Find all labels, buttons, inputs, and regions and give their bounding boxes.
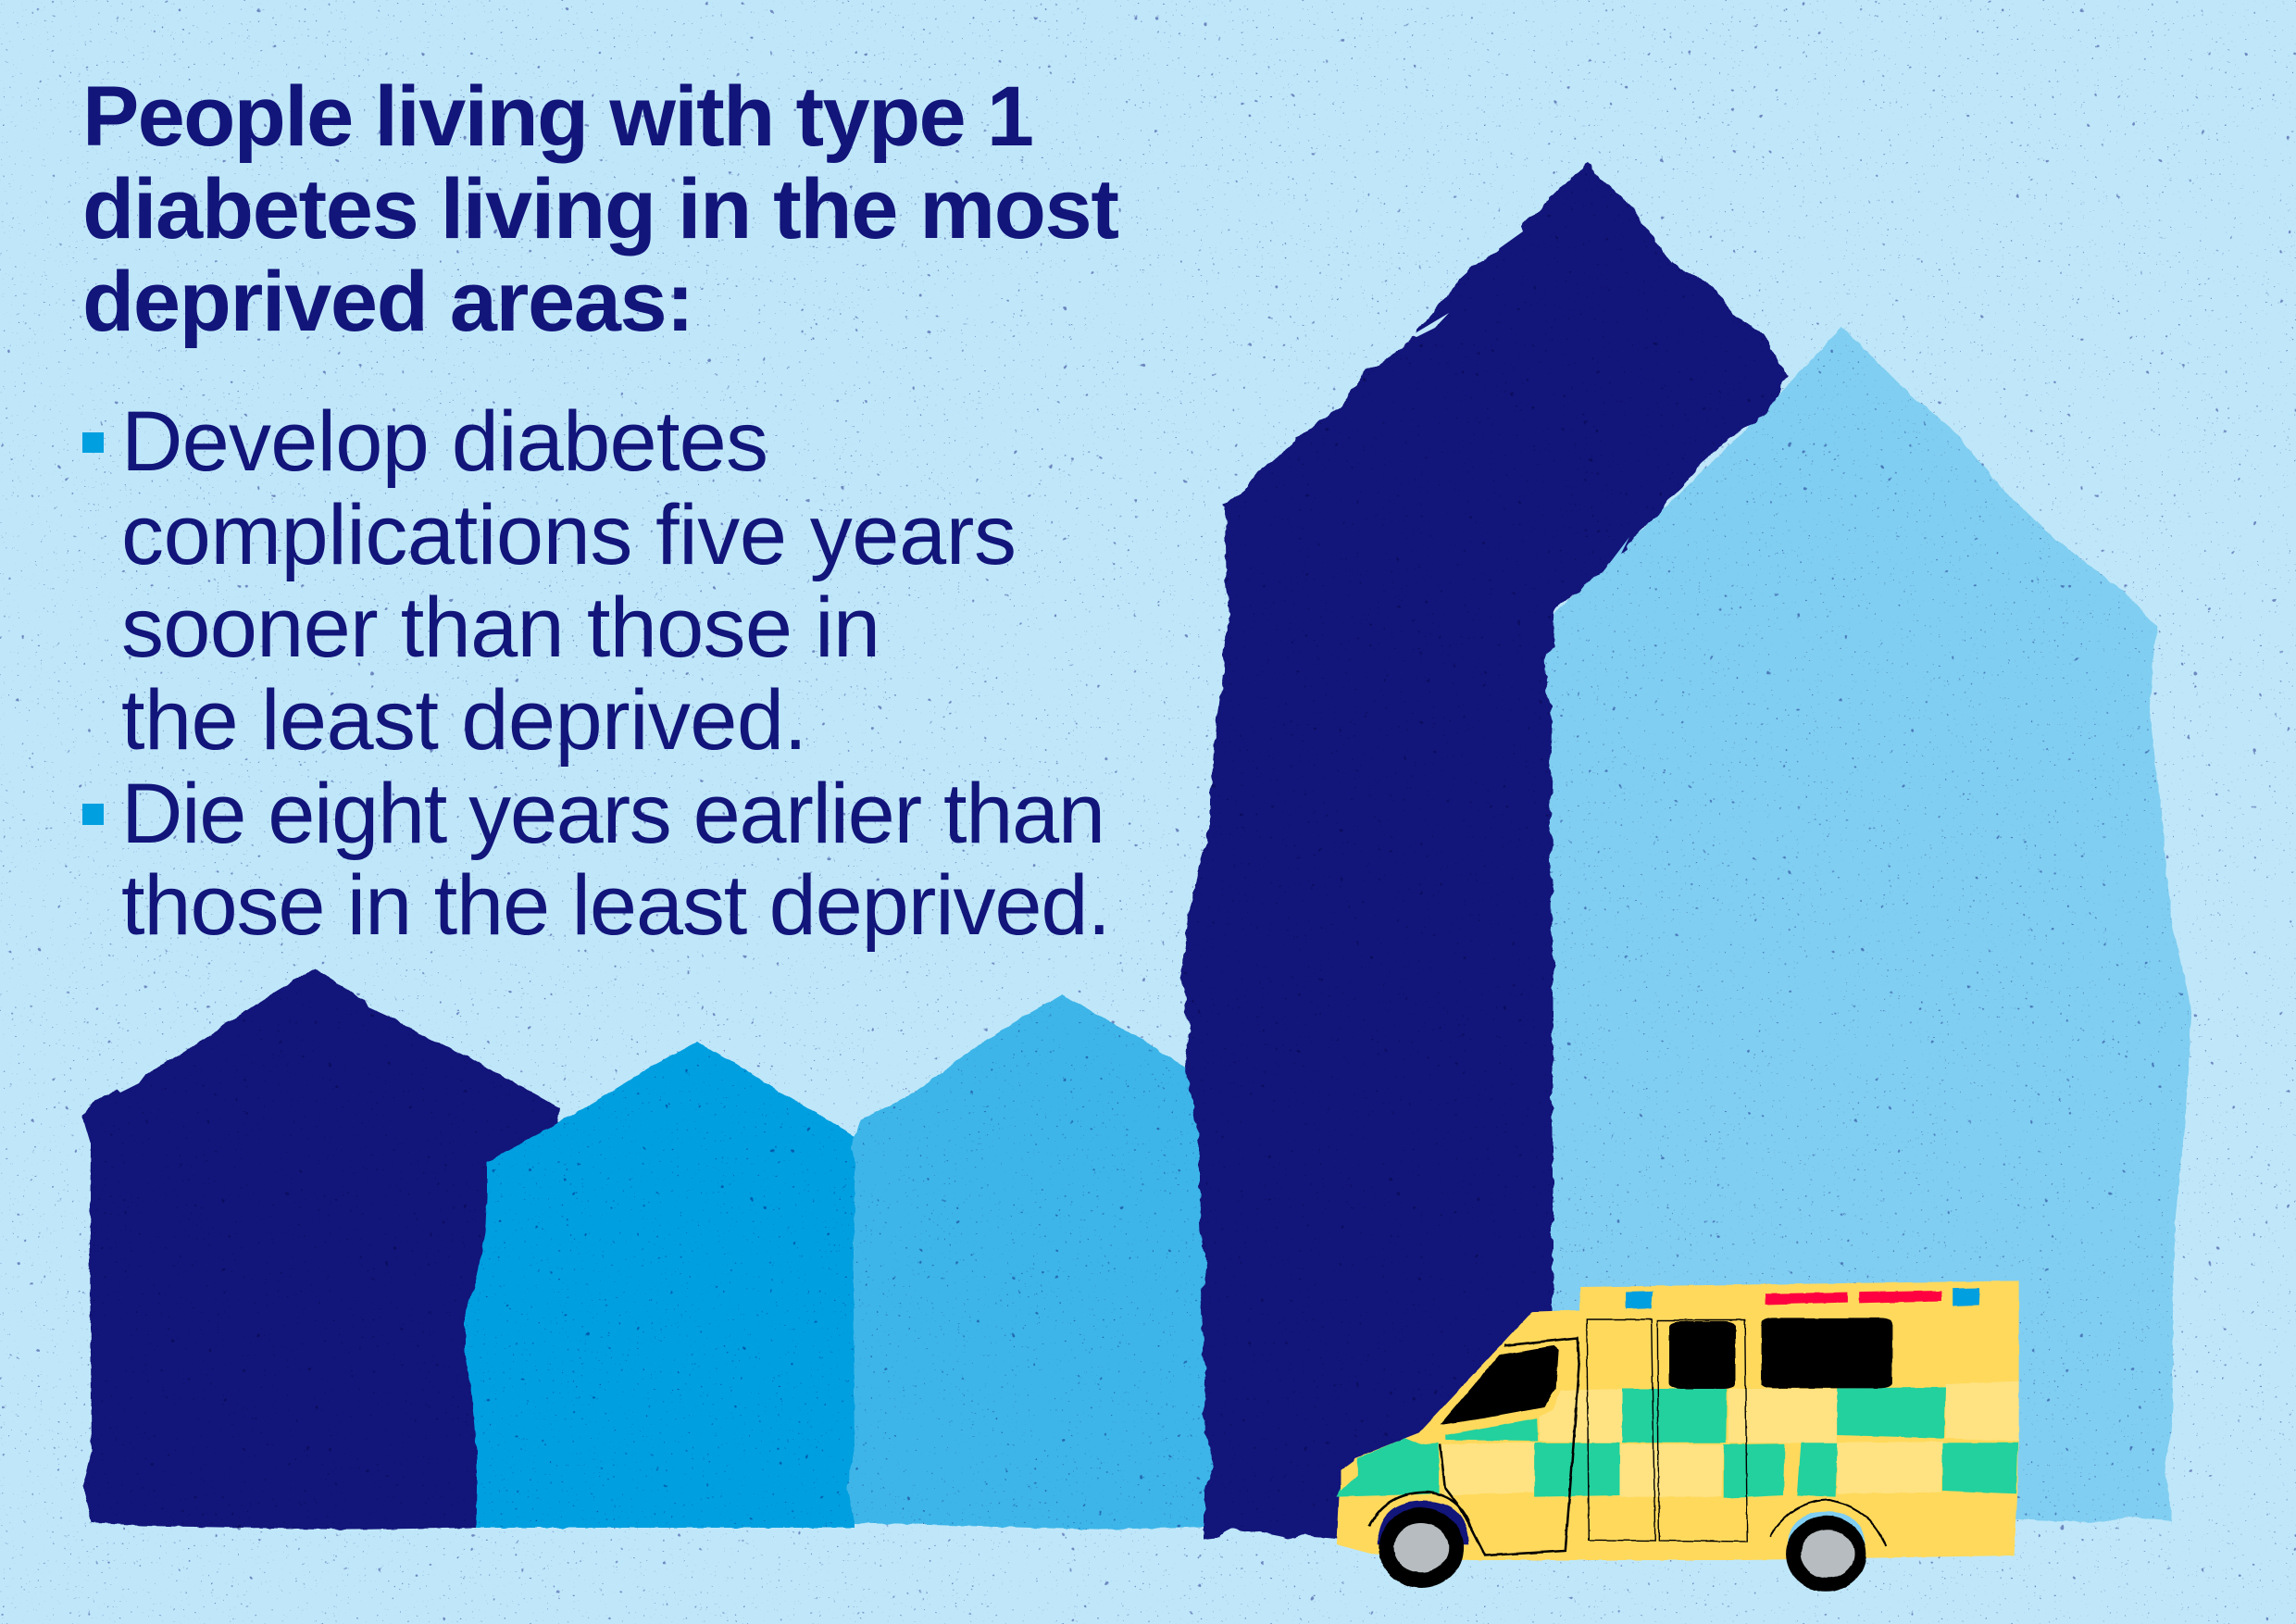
house 1: navy xyxy=(82,968,574,1530)
rear wheel arch xyxy=(1788,1512,1866,1549)
ambulance body xyxy=(1336,1280,2019,1560)
door outlines xyxy=(1369,1319,1886,1555)
rear side window xyxy=(1762,1318,1892,1388)
title: diabetes living in the most xyxy=(82,162,1119,256)
title xyxy=(82,69,1119,349)
green chequer panels xyxy=(1336,1387,2018,1498)
bullet text 1: the least deprived. xyxy=(121,673,807,768)
bullet text 2: Die eight years earlier than xyxy=(121,767,1105,861)
title: deprived areas: xyxy=(82,255,694,349)
front wheel xyxy=(1379,1507,1464,1588)
torn edge slivers xyxy=(116,219,1678,1093)
rear wheel xyxy=(1786,1516,1866,1592)
bullet marker 2 xyxy=(82,804,104,825)
light chequer panels xyxy=(1441,1381,2019,1497)
side door window xyxy=(1669,1321,1735,1389)
bullet marker 1 xyxy=(82,432,104,453)
ambulance xyxy=(1336,1280,2019,1592)
house 3: mid sky blue xyxy=(847,994,1241,1530)
bullet text 1: complications five years xyxy=(121,488,1017,582)
bullet text 1: sooner than those in xyxy=(121,581,880,675)
bullet text 2: those in the least deprived. xyxy=(121,858,1111,953)
title: People living with type 1 xyxy=(82,69,1034,164)
house 4: navy, tallest xyxy=(1181,163,1787,1540)
bullet text 1 xyxy=(121,394,1017,768)
red roof stripes xyxy=(1766,1291,1941,1305)
bullet list xyxy=(82,394,1111,953)
cab window xyxy=(1441,1345,1559,1425)
house 2: bright blue xyxy=(465,1042,855,1528)
bullet text 1: Develop diabetes xyxy=(121,394,768,489)
headlight xyxy=(1341,1458,1357,1491)
house 5: pale blue, tall xyxy=(1518,327,2191,1522)
bullet text 2 xyxy=(121,767,1111,953)
front wheel arch xyxy=(1378,1501,1469,1544)
house chart xyxy=(82,163,2191,1540)
blue roof lights xyxy=(1626,1288,1979,1309)
